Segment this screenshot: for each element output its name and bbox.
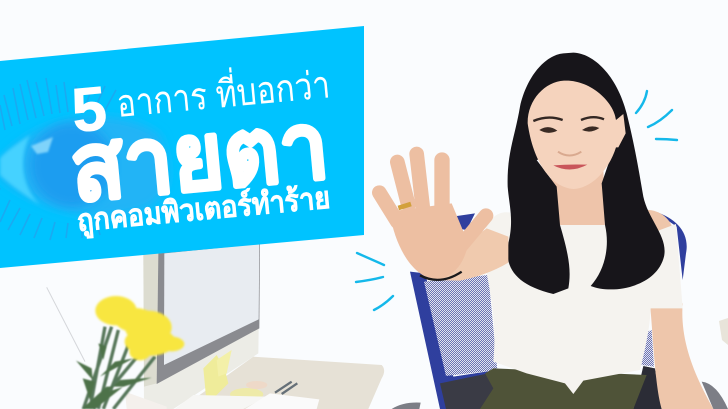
accent ticks near head xyxy=(636,91,677,140)
gold ring xyxy=(398,204,411,208)
eyes xyxy=(539,126,599,133)
long black hair xyxy=(507,53,665,294)
headline number 5: 5 xyxy=(69,74,110,146)
headline: ถูกคอมพิวเตอร์ทำร้าย: ถูกคอมพิวเตอร์ทำร้าย xyxy=(76,181,332,240)
accent ticks near hand xyxy=(356,253,393,310)
eye photo overlay xyxy=(0,78,168,240)
flower stems and leaves xyxy=(76,327,155,409)
headline: อาการ ที่บอกว่า: อาการ ที่บอกว่า xyxy=(114,58,332,126)
nose xyxy=(558,152,581,155)
headline: สายตา: สายตา xyxy=(66,93,333,221)
armrests xyxy=(392,382,728,409)
person with raised hand xyxy=(379,53,728,409)
right arm and shoulder xyxy=(643,210,713,409)
desk xyxy=(180,357,384,409)
white top xyxy=(485,212,683,394)
chair xyxy=(410,212,687,409)
desk scene: monitor, desk and flowers xyxy=(47,240,384,409)
raised left arm xyxy=(428,228,508,281)
white tray xyxy=(125,392,167,409)
pens xyxy=(275,382,297,394)
right edge desk fragment xyxy=(719,318,728,345)
keyboard xyxy=(245,393,319,409)
tape rolls xyxy=(230,381,267,401)
sticky notes xyxy=(203,350,232,400)
neck xyxy=(550,167,605,232)
open hand xyxy=(379,154,486,281)
wristband xyxy=(420,272,462,280)
eyebrows xyxy=(533,117,604,121)
yellow flowers xyxy=(95,296,184,360)
monitor xyxy=(143,240,260,409)
mouth xyxy=(553,164,587,170)
paper xyxy=(175,395,267,409)
thin stem xyxy=(47,287,85,362)
olive skirt xyxy=(480,368,647,409)
blue banner with eye xyxy=(0,26,364,268)
face xyxy=(528,81,626,189)
